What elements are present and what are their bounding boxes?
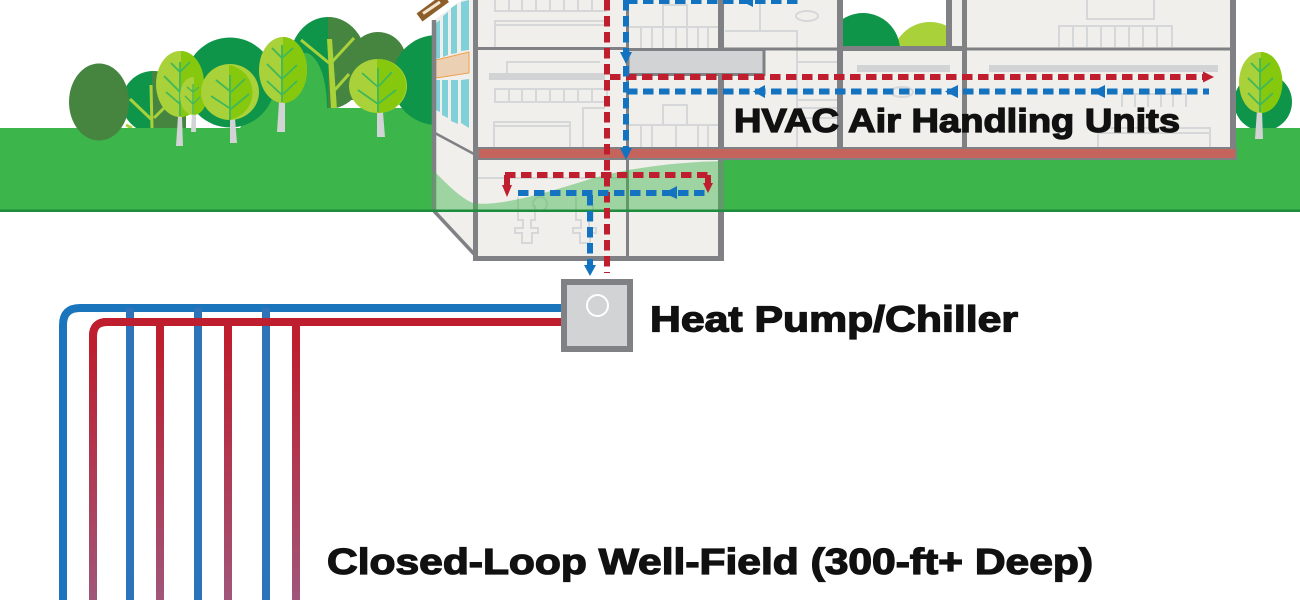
lower windows: [436, 79, 469, 128]
tree: light green 1: [156, 51, 204, 146]
floor slab: [478, 148, 1236, 159]
tree: light green 4: [259, 37, 307, 132]
label: HVAC Air Handling Units: HVAC Air Handling Units: [734, 102, 1180, 139]
ground: [0, 53, 1300, 212]
courtyard: [843, 0, 946, 46]
building: [420, 0, 1236, 261]
ground line: [0, 210, 1300, 212]
ceiling ducts: [489, 65, 1218, 80]
tree: olive oval: [69, 64, 129, 140]
air flow: return (blue): [518, 0, 1209, 265]
tree: light green 5: [349, 59, 407, 137]
air flow: supply (red): [505, 0, 1203, 273]
tree: light green 2: [180, 77, 207, 132]
orange panel: [436, 52, 469, 78]
trees, right side: [1234, 52, 1292, 139]
upper windows: [436, 0, 469, 59]
red arrowheads: [502, 72, 1214, 197]
interior fill: [476, 0, 1233, 258]
ground overlay inside building: [433, 161, 724, 211]
background trees, front of ground: [185, 35, 482, 128]
roof edge: [420, 0, 446, 18]
background trees, left (behind ground): [122, 17, 406, 133]
label: Closed-Loop Well-Field: Closed-Loop Well-Field (300-ft+ Deep): [327, 541, 1093, 582]
well-field loop pipes: [63, 308, 562, 600]
heat pump box: [564, 282, 630, 349]
blue arrowheads: [584, 0, 1105, 276]
tree: light green 3: [201, 64, 259, 143]
room furnishings: [478, 0, 1210, 243]
walls: [473, 0, 1236, 261]
label: Heat Pump/Chiller: Heat Pump/Chiller: [650, 298, 1018, 340]
side facade: [433, 0, 475, 255]
AHU duct box: [628, 50, 764, 74]
